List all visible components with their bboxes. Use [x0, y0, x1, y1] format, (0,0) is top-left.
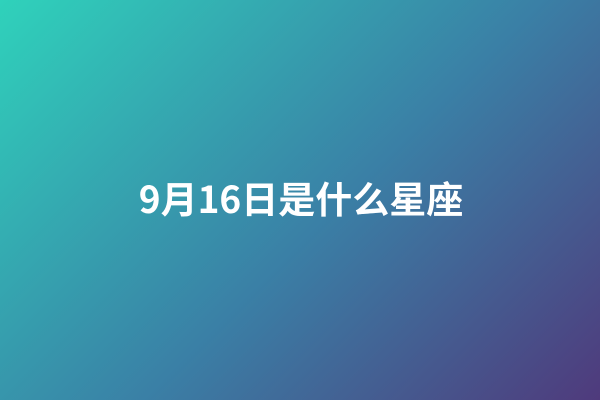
title: 9月16日是什么星座 [139, 170, 463, 224]
